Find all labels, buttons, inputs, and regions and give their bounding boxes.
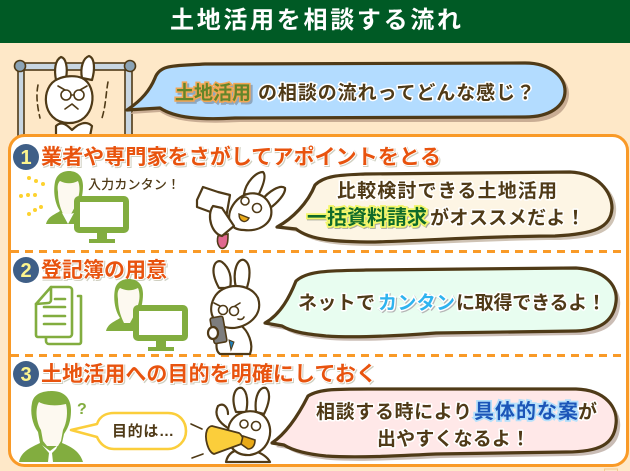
bubble text: に取得できるよ！: [456, 292, 606, 314]
step 3: [13, 361, 620, 462]
step 1 badge: 1: [20, 147, 32, 169]
highlighted text: bulk request: 一括資料請求: [307, 206, 427, 229]
bubble text: 出やすくなるよ！: [377, 428, 530, 450]
title bar: [0, 0, 630, 43]
dashed divider: [11, 354, 626, 357]
icon: person with monitor: [106, 279, 185, 351]
step 1: [13, 144, 616, 248]
illustration: rabbit with phone: [208, 260, 259, 354]
icon: person with monitor: [46, 171, 126, 243]
icon: person: [19, 391, 83, 462]
step 3 heading: 土地活用への目的を明確にしておく: [41, 363, 377, 386]
step 1 heading: 業者や専門家をさがしてアポイントをとる: [41, 145, 441, 169]
bubble text: ネットで: [298, 292, 375, 314]
step 2 badge: [13, 257, 39, 283]
bubble text: 比較検討できる土地活用: [337, 180, 557, 202]
speech bubble: intro question: [127, 63, 569, 123]
speech bubble: step 1 tip: [277, 172, 616, 246]
illustration: rabbit with paper: [197, 172, 285, 248]
step 3 badge: 3: [20, 364, 32, 386]
step 2 heading: 登記簿の用意: [41, 259, 167, 282]
highlighted text: concrete plan: 具体的な案: [474, 400, 578, 423]
speech bubble: step 2 tip: [265, 268, 620, 341]
bubble text: が: [578, 400, 597, 423]
illustration: rabbit at whiteboard: [14, 56, 136, 138]
icon: documents: [36, 287, 81, 344]
question text: の相談の流れってどんな感じ？: [258, 81, 535, 104]
icon: sparkle dots: [19, 176, 45, 216]
step 3 badge: [13, 361, 39, 387]
speech bubble: step 3 tip: [272, 389, 620, 461]
caption: easy input: 入力カンタン！: [88, 177, 180, 192]
illustration: rabbit with megaphone: [191, 388, 270, 462]
dashed divider: [11, 250, 626, 253]
speech bubble: purpose: [71, 413, 186, 449]
bubble text: がオススメだよ！: [430, 206, 585, 229]
main panel: [10, 136, 628, 466]
step 2 badge: 2: [20, 260, 32, 282]
question mark: ?: [77, 401, 87, 418]
highlighted text: easy: カンタン: [378, 292, 455, 314]
title: 土地活用を相談する流れ: [170, 7, 461, 34]
step 2: [13, 257, 620, 354]
speech bubble: purpose: 目的は…: [112, 422, 174, 440]
highlighted text: land use: 土地活用: [175, 82, 251, 104]
step 1 badge: [13, 144, 39, 170]
small corner mark: [604, 469, 618, 471]
bubble text: 相談する時により: [316, 401, 472, 423]
